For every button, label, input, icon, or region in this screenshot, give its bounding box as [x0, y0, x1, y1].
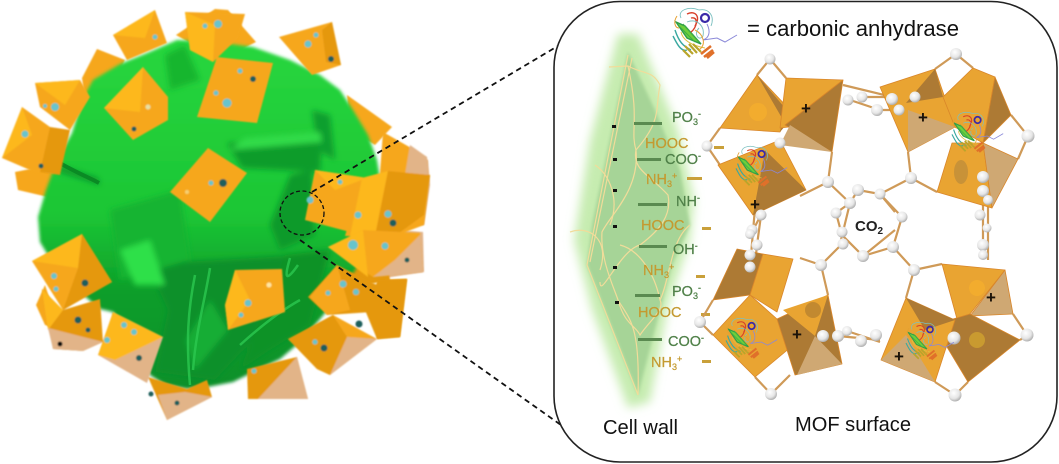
icon: positive charges: + [750, 195, 760, 214]
crystal 15 [288, 315, 377, 375]
group dashes: green bonds [634, 122, 667, 341]
label: surface functional groups: + [669, 262, 674, 272]
crystal 11 [345, 171, 430, 236]
label: surface functional groups: COO [668, 334, 701, 350]
crystal 2 [185, 12, 245, 62]
crystal 20 [42, 289, 103, 351]
icon: positive charges: + [801, 99, 811, 118]
polyhedra: bottom left [713, 249, 842, 377]
callout: magnified area circle [280, 191, 324, 235]
crystal 9 [380, 132, 428, 177]
icon: cell wall membrane [570, 34, 694, 408]
arrow: lower dashed zoom line [300, 240, 568, 430]
crystal 8 [170, 148, 247, 222]
label: surface functional groups: - [698, 109, 701, 119]
crystal 5 [104, 67, 168, 140]
label: surface functional groups: PO [672, 110, 693, 126]
crystal 1 [113, 10, 167, 60]
label: surface functional groups: - [697, 193, 700, 203]
crystal 19 [98, 312, 163, 383]
icon: positive charges: + [792, 325, 802, 344]
label: surface functional groups: NH [676, 194, 697, 210]
crystals on the sphere [2, 10, 430, 420]
label: surface functional groups: 3 [693, 291, 698, 301]
polyhedra: top right [880, 68, 1018, 208]
linker bonds [700, 54, 1028, 395]
label: surface functional groups: 3 [693, 117, 698, 127]
label: CO2: 2 [878, 226, 884, 237]
label: surface functional groups: + [677, 354, 682, 364]
icon: positive charges: + [894, 347, 904, 366]
label: surface functional groups: 3 [664, 270, 669, 280]
legend text: = carbonic anhydrase [747, 16, 959, 41]
crystal 4 [197, 57, 273, 123]
label: surface functional groups: - [698, 283, 701, 293]
label: CO2: CO [855, 218, 878, 235]
crystal 12 [328, 230, 423, 277]
label: surface functional groups: HOOC [645, 136, 688, 152]
crystal 7 [2, 107, 70, 175]
label: surface functional groups: - [698, 151, 701, 161]
label: MOF surface: MOF surface [795, 414, 911, 436]
label: surface functional groups: HOOC [638, 305, 682, 321]
green cell body [38, 40, 385, 389]
group dashes: gold bonds [687, 146, 724, 363]
crystal 16 [225, 269, 285, 330]
crystal 3 [279, 22, 341, 75]
panel: magnified interface [554, 2, 1057, 462]
crystals behind the sphere [15, 9, 430, 339]
label: surface functional groups: 3 [667, 179, 672, 189]
label: surface functional groups: HOOC [641, 218, 684, 234]
icon: positive charges [750, 99, 996, 366]
MOF framework [694, 48, 1034, 402]
icon: carbonic anhydrase legend [673, 8, 737, 58]
label: surface functional groups: NH [646, 172, 667, 188]
label: surface functional groups [638, 109, 704, 372]
label: surface functional groups: - [701, 333, 704, 343]
icon: enzymes bound to MOF [726, 112, 1003, 359]
crystal 13 [356, 279, 407, 339]
linker nodes: white balls [694, 48, 1034, 402]
arrow: upper dashed zoom line [312, 40, 568, 192]
icon: positive charges: + [918, 108, 928, 127]
label: surface functional groups: OH [673, 242, 695, 258]
crystal 21 [32, 234, 112, 310]
label: surface functional groups: PO [672, 284, 693, 300]
label: cell wall: Cell wall [603, 417, 678, 439]
label: surface functional groups: NH [643, 263, 664, 279]
label: surface functional groups: + [672, 171, 677, 181]
crystal 14 [308, 265, 377, 315]
label: surface functional groups: - [695, 241, 698, 251]
polyhedra: bottom right [881, 264, 1020, 382]
polyhedra: top left [718, 75, 843, 215]
crystal 18 [148, 377, 212, 420]
icon: membrane negative charges [612, 125, 619, 304]
crystal 10 [305, 170, 367, 232]
crystal 6 [35, 80, 90, 130]
label: surface functional groups: 3 [672, 362, 677, 372]
label: surface functional groups: NH [651, 355, 672, 371]
panel: microbe coated with MOF crystals [2, 9, 430, 420]
label: surface functional groups: COO [665, 152, 698, 168]
icon: positive charges: + [986, 288, 996, 307]
crystal 17 [247, 357, 308, 399]
